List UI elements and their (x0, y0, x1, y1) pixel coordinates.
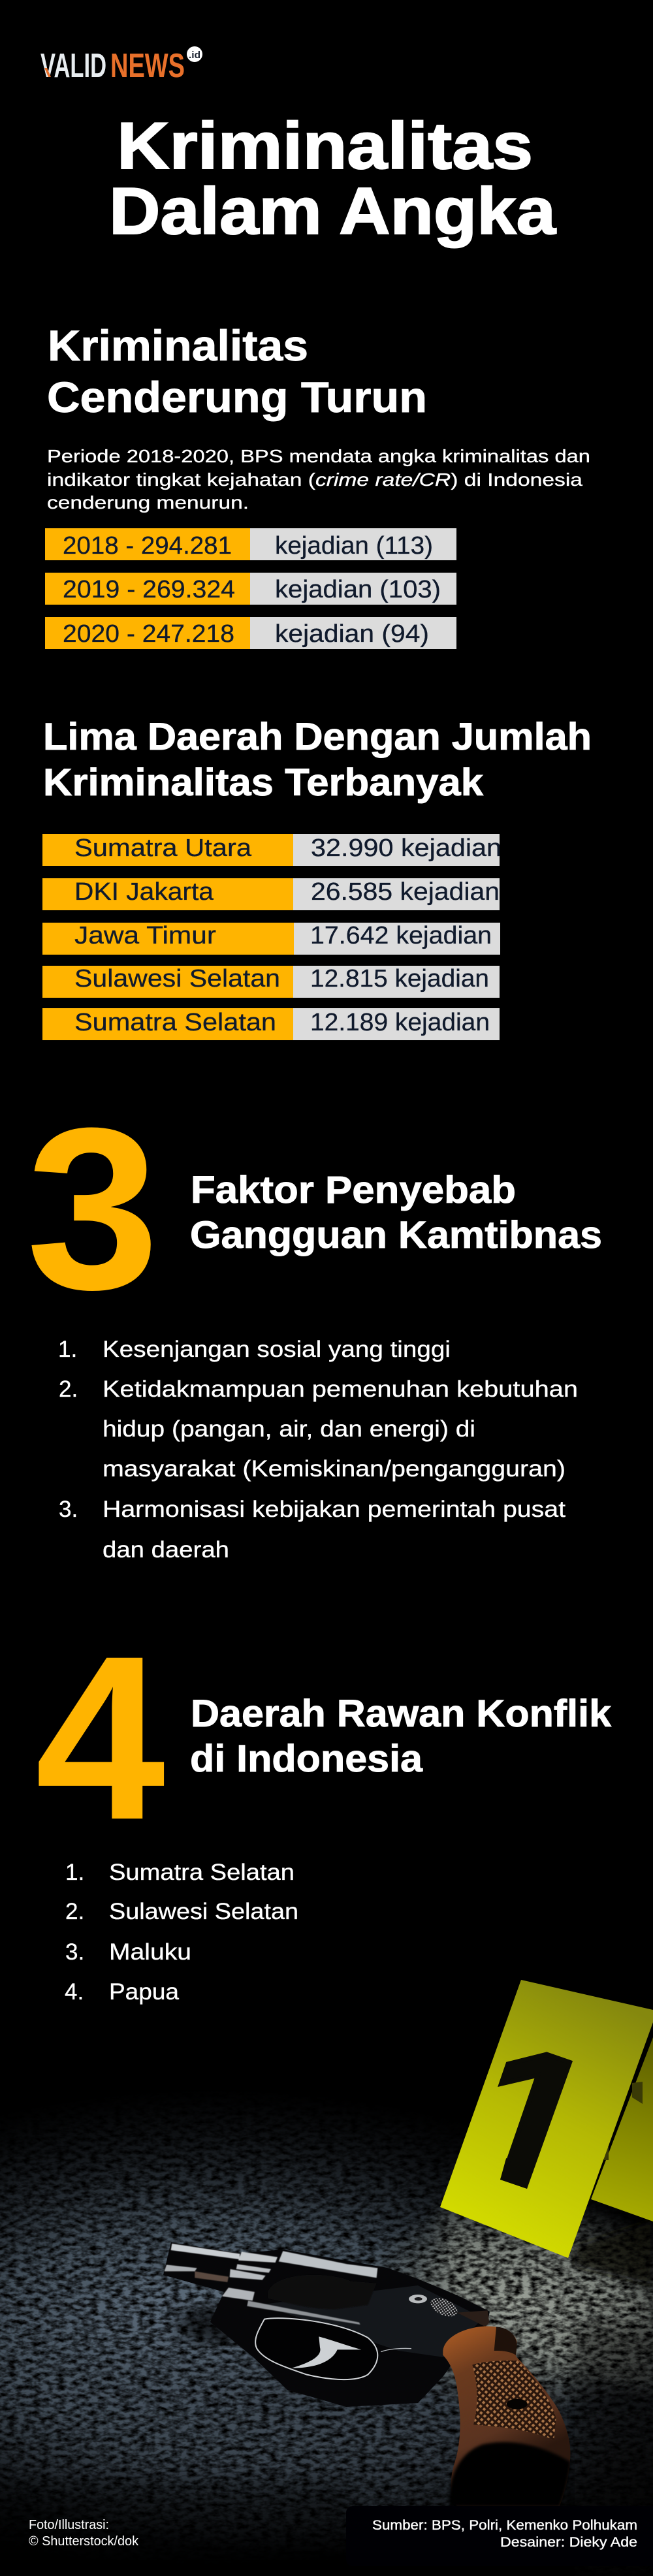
row: 2018 (45, 528, 456, 560)
intro paragraph (47, 446, 590, 513)
list of factors: Kesenjangan sosial yang tinggi (103, 1337, 451, 1362)
intro paragraph: Periode 2018-2020, BPS mendata angka kriminalitas dan (47, 446, 590, 466)
row: Sumatra Utara: 32.990 kejadian (311, 835, 502, 862)
list of regions: 2. (65, 1899, 84, 1924)
list of factors: 3. (59, 1497, 78, 1522)
list of factors: 2. (59, 1376, 78, 1402)
list of factors: masyarakat (Kemiskinan/pengangguran) (103, 1456, 565, 1482)
row: 2018: kejadian (113) (275, 532, 433, 560)
heading: Kriminalitas (48, 321, 308, 370)
heading: Lima Daerah Dengan Jumlah (43, 716, 592, 758)
list of factors: Harmonisasi kebijakan pemerintah pusat (103, 1497, 565, 1522)
trigger guard and trigger (255, 2318, 411, 2379)
source box: Desainer: Dieky Ade (500, 2535, 637, 2550)
list of regions (65, 1860, 298, 2005)
title: Dalam Angka (109, 175, 556, 248)
heading: Cenderung Turun (47, 373, 427, 421)
photo credit: © Shutterstock/dok (29, 2534, 139, 2549)
panel: 4 daerah rawan konflik (35, 1607, 612, 2005)
row: DKI Jakarta: DKI Jakarta (74, 878, 214, 906)
icon: revolver (163, 2242, 571, 2506)
row: 2019: kejadian (103) (275, 576, 441, 603)
icon: front evidence marker number 1: 1 (445, 1999, 618, 2239)
heading (190, 1693, 612, 1780)
row: Sulawesi Selatan: Sulawesi Selatan (74, 965, 280, 993)
row: 2019 (45, 573, 456, 605)
credit fade (0, 2560, 653, 2576)
logo: Validnews.id (40, 46, 202, 85)
row: DKI Jakarta (42, 878, 500, 910)
heading: Daerah Rawan Konflik (191, 1693, 612, 1735)
heading: Faktor Penyebab (191, 1169, 516, 1211)
row: Sumatra Selatan: Sumatra Selatan (74, 1009, 276, 1036)
intro paragraph: cenderung menurun. (47, 492, 249, 513)
list of factors: hidup (pangan, air, dan energi) di (103, 1416, 475, 1442)
heading: Kriminalitas Terbanyak (43, 761, 484, 804)
big number 4: 4 (35, 1607, 167, 1868)
list of factors: Ketidakmampuan pemenuhan kebutuhan (103, 1376, 578, 1402)
heading: di Indonesia (190, 1738, 423, 1780)
logo: Validnews.id: NEWS (110, 47, 185, 85)
row: 2020 (45, 617, 456, 649)
photo credit: Foto/Illustrasi: (29, 2518, 109, 2532)
list of regions: Sulawesi Selatan (109, 1899, 298, 1924)
revolver frame silhouette (163, 2242, 490, 2407)
row: Jawa Timur (42, 922, 500, 955)
photo credit (29, 2518, 139, 2549)
title: Kriminalitas (117, 110, 533, 183)
row: Jawa Timur: 17.642 kejadian (310, 922, 492, 949)
list of factors: dan daerah (103, 1537, 229, 1563)
row: Sumatra Selatan: 12.189 kejadian (310, 1009, 490, 1036)
icon: front evidence marker number 1 (440, 1980, 653, 2258)
row: 2019: 2019 - 269.324 (63, 576, 235, 603)
wooden grip (443, 2327, 571, 2506)
cylinder and barrel highlights (165, 2244, 377, 2325)
list of factors (58, 1337, 578, 1563)
icon: back evidence marker (591, 2037, 653, 2221)
row: 2020: 2020 - 247.218 (63, 620, 234, 648)
list of regions: 1. (65, 1860, 84, 1885)
heading: Gangguan Kamtibnas (190, 1214, 602, 1256)
row: 2020: kejadian (94) (275, 620, 429, 648)
logo: Validnews.id: .id (189, 50, 200, 61)
list of factors: 1. (58, 1337, 77, 1362)
panel: kriminalitas cenderung turun (45, 321, 590, 649)
panel: 3 faktor penyebab (26, 1079, 602, 1563)
big number 3: 3 (26, 1079, 159, 1337)
row: 2018: 2018 - 294.281 (63, 532, 232, 560)
row: Jawa Timur: Jawa Timur (74, 922, 216, 949)
row: Sumatra Utara: Sumatra Utara (74, 835, 252, 862)
asphalt ground (0, 2076, 653, 2576)
row: Sulawesi Selatan: 12.815 kejadian (310, 965, 489, 993)
photo: revolver and evidence marker on asphalt (0, 1980, 653, 2576)
list of regions: Maluku (109, 1939, 191, 1965)
list of regions: Papua (109, 1979, 180, 2005)
row: Sulawesi Selatan (42, 965, 500, 998)
list of regions: 3. (65, 1939, 84, 1965)
source box (346, 2506, 653, 2566)
heading (190, 1169, 602, 1256)
gun shadow (176, 2305, 268, 2344)
intro paragraph: indikator tingkat kejahatan ( crime rate/CR ) di Indonesia (47, 469, 583, 490)
list of regions: Sumatra Selatan (109, 1860, 295, 1885)
row: Sumatra Utara (42, 834, 502, 866)
hammer (409, 2294, 489, 2327)
heading (43, 716, 592, 804)
title (109, 110, 556, 248)
logo: Validnews.id: VALID (40, 47, 106, 85)
heading (47, 321, 427, 421)
row: Sumatra Selatan (42, 1008, 500, 1040)
panel: lima daerah (42, 716, 592, 1040)
list of regions: 4. (65, 1979, 84, 2005)
source box: Sumber: BPS, Polri, Kemenko Polhukam (372, 2518, 637, 2533)
row: DKI Jakarta: 26.585 kejadian (311, 878, 500, 906)
